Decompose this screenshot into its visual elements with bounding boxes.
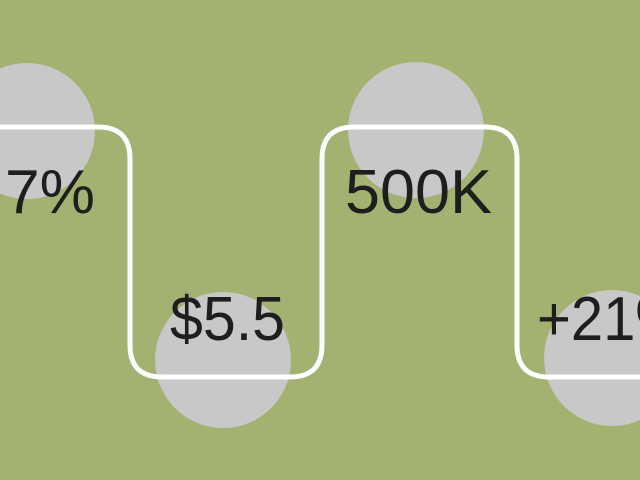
stat: 7%: 7%	[5, 158, 95, 227]
circle: 500K marker	[348, 62, 484, 198]
wave line	[0, 127, 640, 377]
circle: +21% marker	[544, 290, 640, 426]
circle: $5.5 marker	[155, 292, 291, 428]
stat: 500K: 500K	[345, 158, 492, 227]
circle: 7% marker	[0, 63, 95, 199]
stat: $5.5: $5.5	[170, 285, 285, 354]
